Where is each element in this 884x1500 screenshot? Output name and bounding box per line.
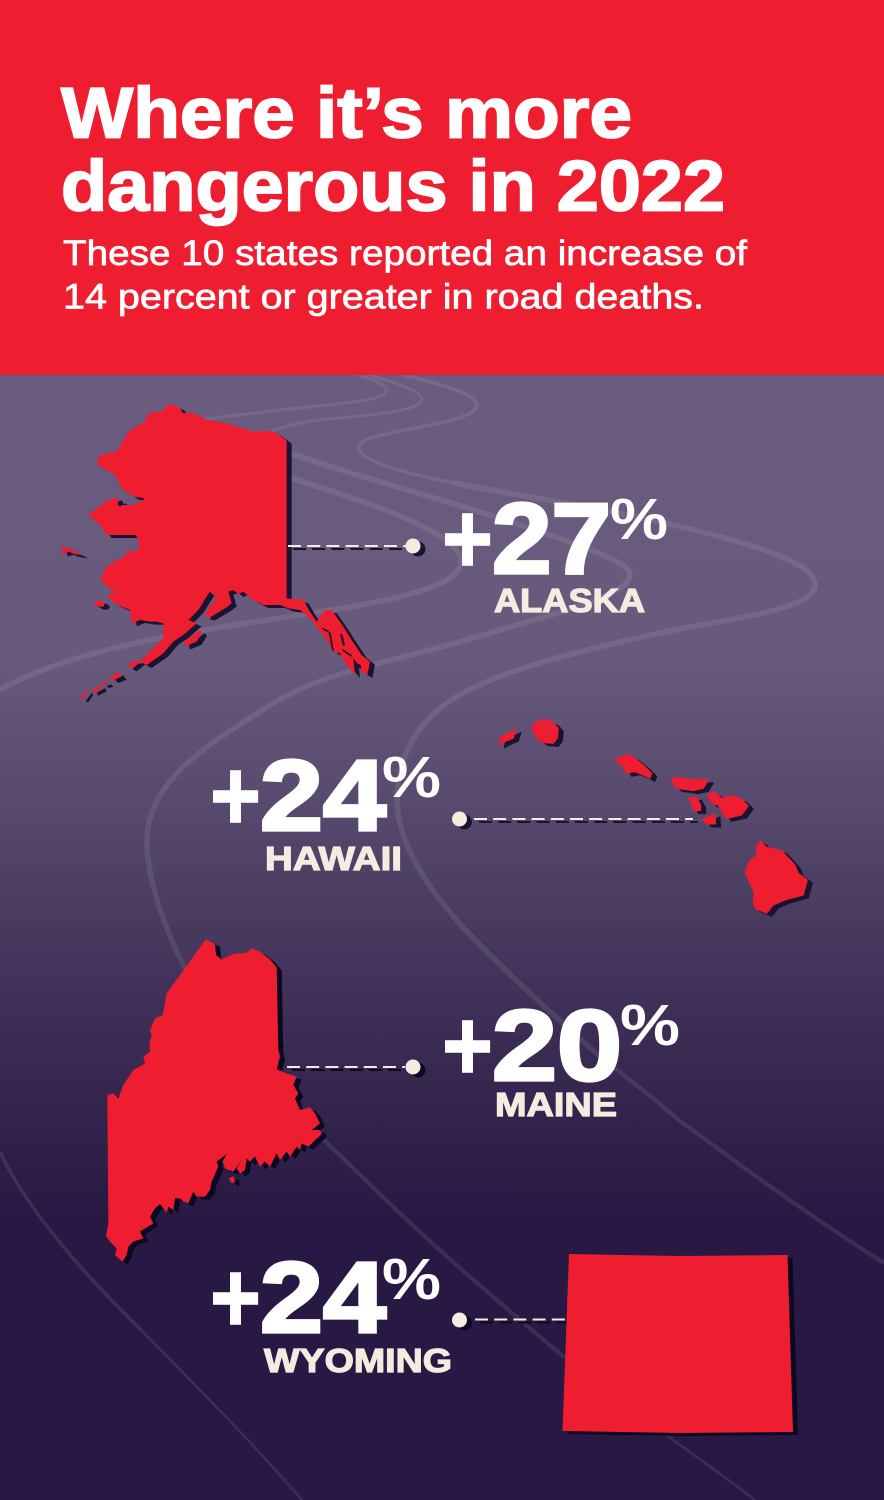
connector: Maine xyxy=(287,1060,420,1074)
map: Maine xyxy=(106,939,322,1262)
stat: Alaska +27%: ALASKA xyxy=(494,582,645,619)
stat: Wyoming +24% xyxy=(210,1242,452,1379)
map: Alaska xyxy=(61,403,370,699)
stat: Maine +20%: MAINE xyxy=(495,1086,617,1123)
panel: Hawaii xyxy=(210,719,807,913)
stat: Hawaii +24%: % xyxy=(382,745,441,810)
title xyxy=(61,74,725,226)
subtitle: 14 percent or greater in road deaths. xyxy=(63,278,704,316)
panel: Maine xyxy=(106,939,680,1262)
map: Hawaii xyxy=(499,719,807,913)
subtitle xyxy=(63,234,747,316)
stat: Wyoming +24%: + xyxy=(210,1242,261,1354)
connector: Hawaii xyxy=(452,812,693,826)
stat: Alaska +27%: 27 xyxy=(492,483,611,595)
panel: header banner xyxy=(0,0,884,375)
panel: Alaska xyxy=(61,403,668,699)
stat: Maine +20%: + xyxy=(442,990,493,1102)
map: Wyoming xyxy=(562,1254,793,1433)
stat: Wyoming +24%: % xyxy=(382,1247,441,1312)
title: Where it’s more xyxy=(61,74,632,154)
connector: Alaska xyxy=(288,538,420,554)
stat: Alaska +27%: % xyxy=(610,487,668,552)
stat: Hawaii +24%: 24 xyxy=(260,740,386,852)
stat: Wyoming +24%: 24 xyxy=(260,1242,386,1354)
stat: Alaska +27%: + xyxy=(442,483,493,595)
winding road lines xyxy=(0,375,884,1500)
stat: Maine +20%: % xyxy=(620,993,680,1058)
title: dangerous in 2022 xyxy=(61,148,725,226)
connector: Wyoming xyxy=(452,1312,568,1328)
stat: Hawaii +24% xyxy=(210,740,441,877)
stat: Alaska +27% xyxy=(442,483,668,619)
stat: Maine +20% xyxy=(442,990,680,1123)
stat: Maine +20%: 20 xyxy=(492,990,622,1102)
subtitle: These 10 states reported an increase of xyxy=(63,234,747,273)
panel: Wyoming xyxy=(210,1242,793,1433)
stat: Wyoming +24%: WYOMING xyxy=(264,1342,452,1379)
panel: map background xyxy=(0,375,884,1500)
stat: Hawaii +24%: HAWAII xyxy=(265,840,402,877)
stat: Hawaii +24%: + xyxy=(210,740,261,852)
